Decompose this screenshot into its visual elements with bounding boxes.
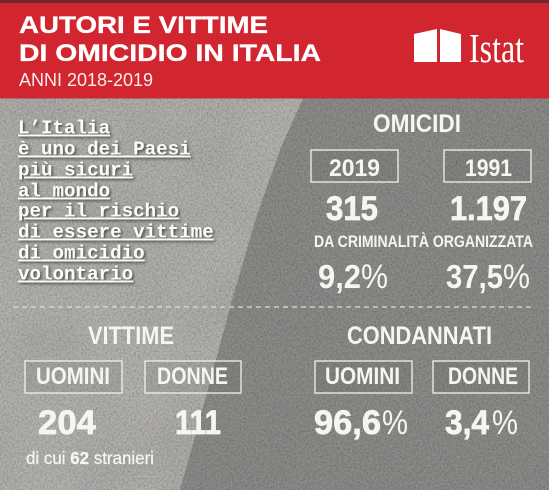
percentage: 3,4%: % xyxy=(492,404,518,442)
label box: uomini: UOMINI xyxy=(325,363,400,390)
title: AUTORI E VITTIME xyxy=(19,12,268,39)
number: 111: 111 xyxy=(175,404,221,442)
text block: intro statement: è uno dei Paesi xyxy=(18,138,191,160)
label box: 1991: 1991 xyxy=(465,155,512,182)
percentage: 37,5%: 37,5 xyxy=(446,258,503,295)
label box: 2019 xyxy=(311,150,398,182)
divider xyxy=(13,306,533,308)
text block: intro statement: più sicuri xyxy=(18,160,133,182)
label box: 1991 xyxy=(444,150,531,182)
text block: intro statement: di omicidio xyxy=(18,242,145,264)
label box: donne: DONNE xyxy=(157,363,228,390)
panel: condannati xyxy=(314,322,529,442)
number: 1.197: 1.197 xyxy=(450,190,527,228)
heading: omicidi: OMICIDI xyxy=(373,110,461,138)
text block: intro statement: per il rischio xyxy=(18,200,179,222)
label box: 2019: 2019 xyxy=(329,155,380,182)
percentage: 3,4% xyxy=(445,404,518,442)
subtitle: ANNI 2018-2019 xyxy=(19,70,153,90)
text block: intro statement: L’Italia xyxy=(18,118,111,140)
title xyxy=(19,12,321,67)
title: DI OMICIDIO IN ITALIA xyxy=(19,40,321,67)
percentage: 96,6%: 96,6 xyxy=(314,404,381,442)
note: stranieri: di cui 62 stranieri xyxy=(26,448,154,468)
percentage: 3,4%: 3,4 xyxy=(445,404,489,442)
label box: donne: DONNE xyxy=(448,363,518,390)
percentage: 9,2%: 9,2 xyxy=(318,258,361,295)
label box: donne xyxy=(433,361,529,393)
percentage: 37,5%: % xyxy=(503,258,530,296)
logo: Istat: Istat xyxy=(469,25,524,71)
number: 315: 315 xyxy=(326,190,378,228)
percentage: 96,6%: % xyxy=(382,404,408,442)
number: 204: 204 xyxy=(38,404,96,442)
heading: condannati: CONDANNATI xyxy=(347,322,492,350)
text block: intro statement: di essere vittime xyxy=(18,222,214,244)
text block: intro statement xyxy=(18,118,214,286)
panel: omicidi xyxy=(311,110,533,296)
text block: intro statement: al mondo xyxy=(18,180,110,202)
text block: intro statement: volontario xyxy=(18,264,133,286)
panel: vittime xyxy=(25,322,241,468)
label box: uomini: UOMINI xyxy=(36,363,110,390)
percentage: 9,2%: % xyxy=(361,258,388,296)
percentage: 9,2% xyxy=(318,258,388,296)
logo: Istat xyxy=(414,25,524,71)
header band xyxy=(0,0,549,98)
heading: vittime: VITTIME xyxy=(88,322,174,350)
